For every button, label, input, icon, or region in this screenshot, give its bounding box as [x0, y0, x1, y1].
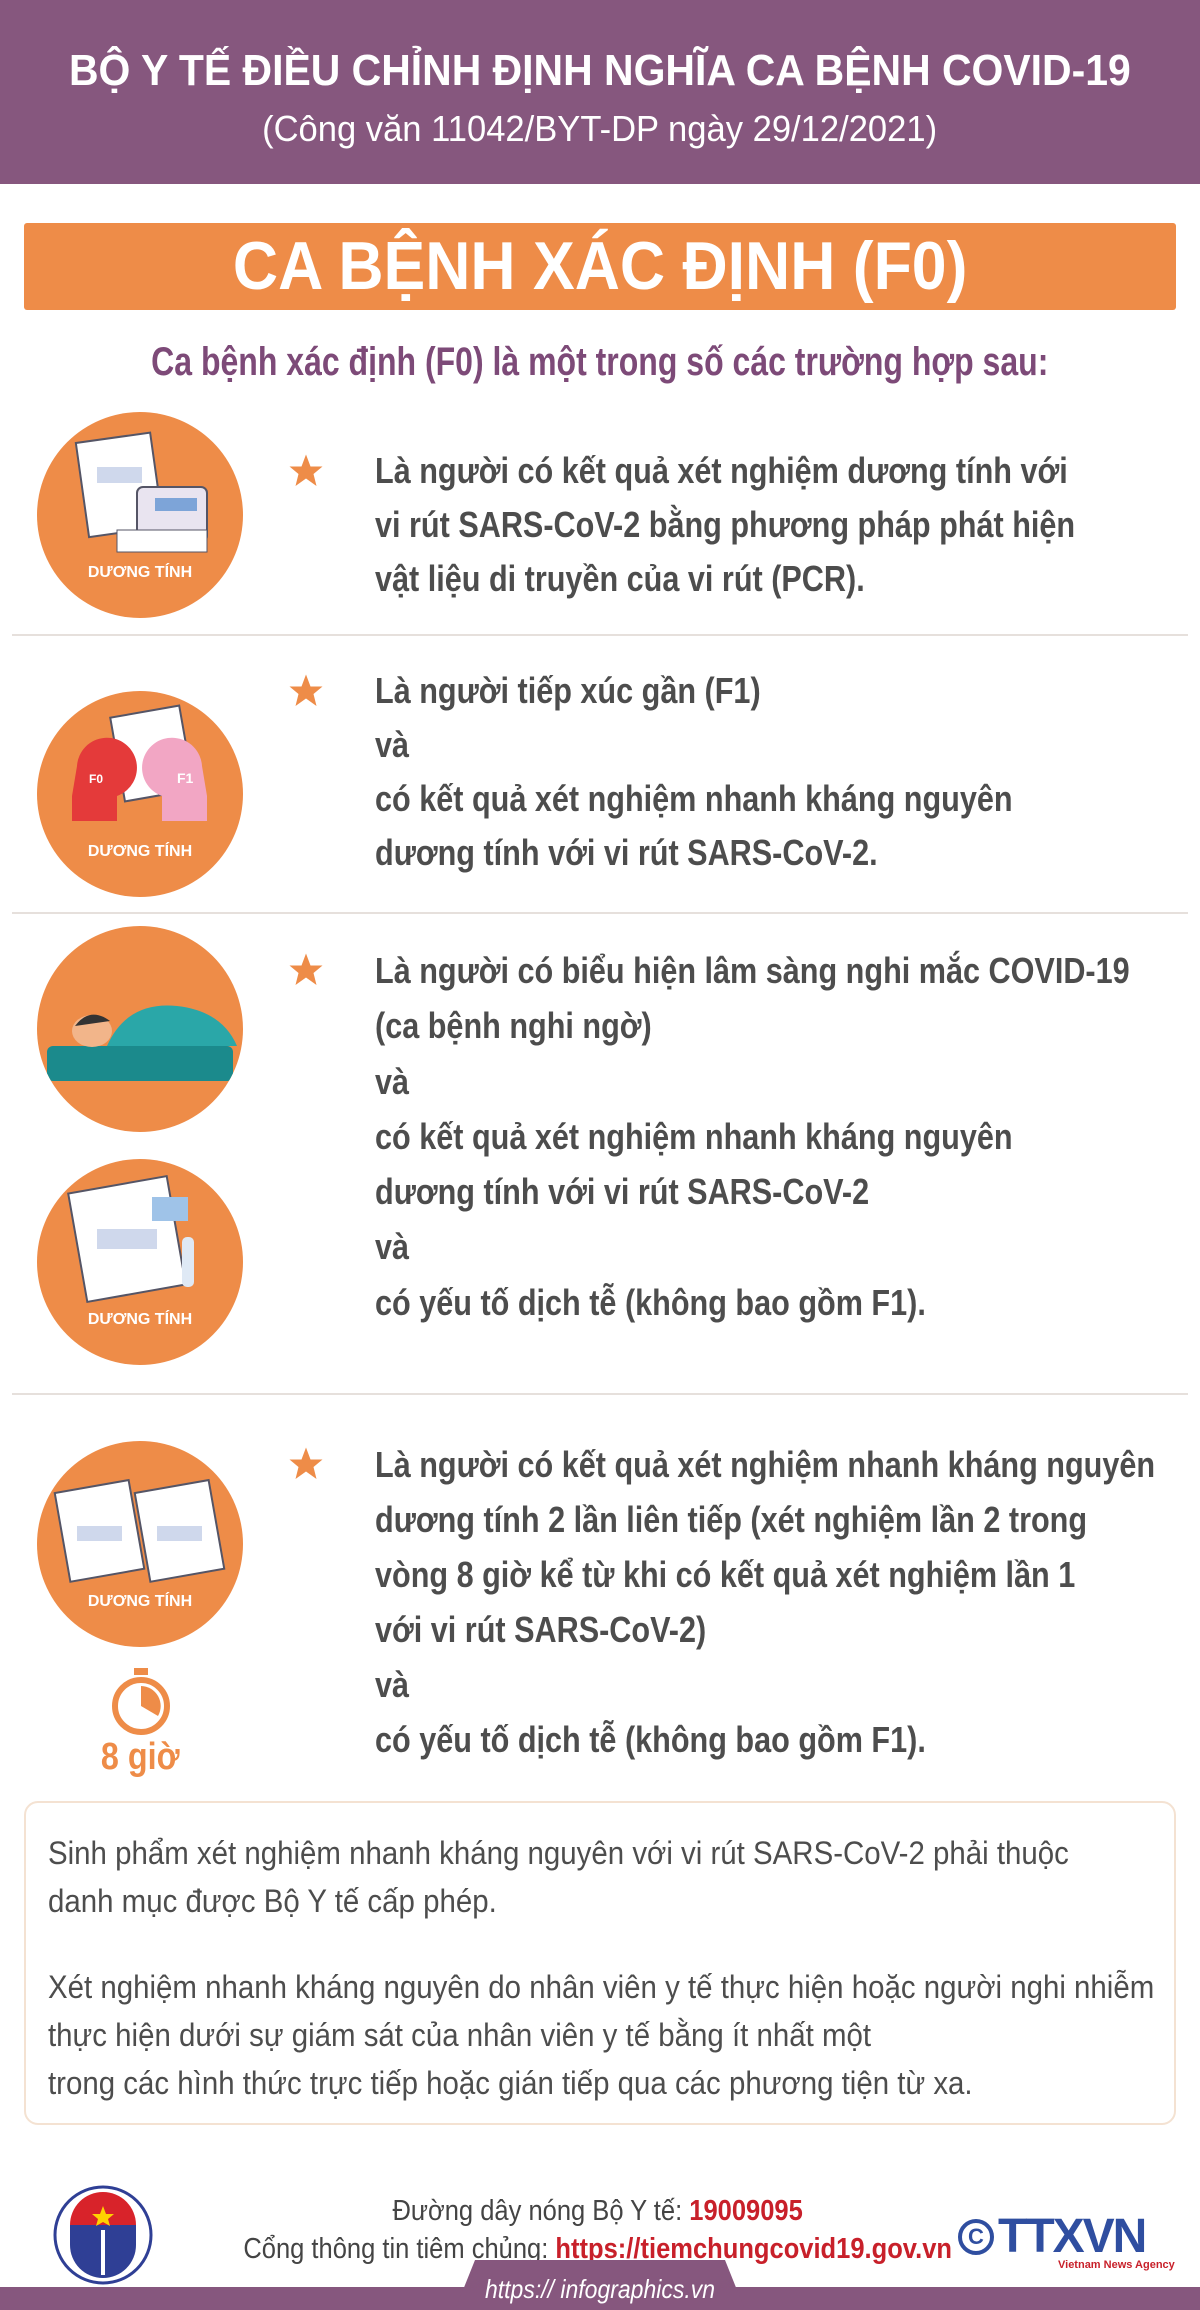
logo: ministry of health: [54, 2186, 152, 2284]
star 1: [290, 454, 322, 486]
text 3: và: [375, 1061, 409, 1102]
hotline: Cổng thông tin tiêm chủng: https://tiemchungcovid19.gov.vn: [243, 2233, 952, 2265]
8 gio label: 8 giờ: [101, 1736, 179, 1778]
footer tab: [464, 2260, 736, 2304]
title: BỘ Y TẾ ĐIỀU CHỈNH ĐỊNH NGHĨA CA BỆNH COVID-19: [69, 46, 1131, 95]
text 1: vi rút SARS-CoV-2 bằng phương pháp phát hiện: [375, 504, 1075, 545]
star 2: [290, 674, 322, 706]
text 2: Là người tiếp xúc gần (F1): [375, 670, 761, 711]
text 4: Là người có kết quả xét nghiệm nhanh kháng nguyên: [375, 1444, 1155, 1485]
icon: F0 F1: F1: [177, 770, 194, 786]
text 4: với vi rút SARS-CoV-2): [375, 1609, 706, 1650]
icon: test paper: DƯƠNG TÍNH: [88, 1311, 192, 1328]
text 4: dương tính 2 lần liên tiếp (xét nghiệm lần 2 trong: [375, 1499, 1087, 1540]
intro text: Ca bệnh xác định (F0) là một trong số các trường hợp sau:: [151, 340, 1049, 384]
icon: two tests: DƯƠNG TÍNH: [88, 1593, 192, 1610]
icon: F0 F1: F0: [89, 772, 103, 786]
banner: CA BỆNH XÁC ĐỊNH (F0): [233, 228, 967, 304]
text 2: dương tính với vi rút SARS-CoV-2.: [375, 832, 878, 873]
text 4: và: [375, 1664, 409, 1705]
footer bar: [0, 2287, 1200, 2310]
banner: [24, 223, 1176, 310]
logo: TTXVN: C: [968, 2224, 984, 2249]
text 3: có yếu tố dịch tễ (không bao gồm F1).: [375, 1282, 926, 1323]
text 3: (ca bệnh nghi ngờ): [375, 1005, 652, 1046]
note box: Xét nghiệm nhanh kháng nguyên do nhân viên y tế thực hiện hoặc người nghi nhiễm: [48, 1969, 1154, 2005]
text 4: vòng 8 giờ kể từ khi có kết quả xét nghiệm lần 1: [375, 1554, 1075, 1595]
note box: danh mục được Bộ Y tế cấp phép.: [48, 1883, 497, 1919]
note box: thực hiện dưới sự giám sát của nhân viên y tế bằng ít nhất một: [48, 2017, 871, 2053]
icon: positive test 1: [37, 412, 243, 618]
icon: F0 F1: DƯƠNG TÍNH: [88, 843, 192, 860]
text 3: và: [375, 1226, 409, 1267]
icon: F0 F1: [37, 691, 243, 897]
logo: TTXVN: [958, 2210, 1175, 2271]
icon: stopwatch: [112, 1668, 170, 1735]
text 4: có yếu tố dịch tễ (không bao gồm F1).: [375, 1719, 926, 1760]
star 4: [290, 1448, 322, 1479]
header: [0, 0, 1200, 184]
text 1: Là người có kết quả xét nghiệm dương tính với: [375, 450, 1068, 491]
text 2: và: [375, 724, 409, 765]
star 3: [290, 954, 322, 985]
text 4: [375, 1444, 1155, 1760]
text 1: [375, 450, 1075, 599]
text 3: Là người có biểu hiện lâm sàng nghi mắc COVID-19: [375, 950, 1130, 991]
text 2: [375, 670, 1013, 873]
note box: [24, 1801, 1176, 2125]
footer tab: https:// infographics.vn: [485, 2274, 715, 2304]
text 1: vật liệu di truyền của vi rút (PCR).: [375, 558, 865, 599]
icon: test paper: [37, 1159, 243, 1365]
subtitle: (Công văn 11042/BYT-DP ngày 29/12/2021): [262, 108, 938, 149]
hotline: Đường dây nóng Bộ Y tế: 19009095: [392, 2195, 803, 2227]
text 2: có kết quả xét nghiệm nhanh kháng nguyên: [375, 778, 1013, 819]
icon: patient in bed: [37, 926, 243, 1132]
hotline: [243, 2195, 952, 2265]
logo: TTXVN: Vietnam News Agency: [1058, 2259, 1175, 2271]
icon: positive test 1: DƯƠNG TÍNH: [88, 564, 192, 581]
icon: two tests: [37, 1441, 243, 1647]
text 3: [375, 950, 1130, 1323]
text 3: dương tính với vi rút SARS-CoV-2: [375, 1171, 869, 1212]
logo: TTXVN: TTXVN: [998, 2210, 1145, 2263]
text 3: có kết quả xét nghiệm nhanh kháng nguyên: [375, 1116, 1013, 1157]
note box: Sinh phẩm xét nghiệm nhanh kháng nguyên với vi rút SARS-CoV-2 phải thuộc: [48, 1835, 1069, 1871]
note box: trong các hình thức trực tiếp hoặc gián tiếp qua các phương tiện từ xa.: [48, 2065, 973, 2101]
